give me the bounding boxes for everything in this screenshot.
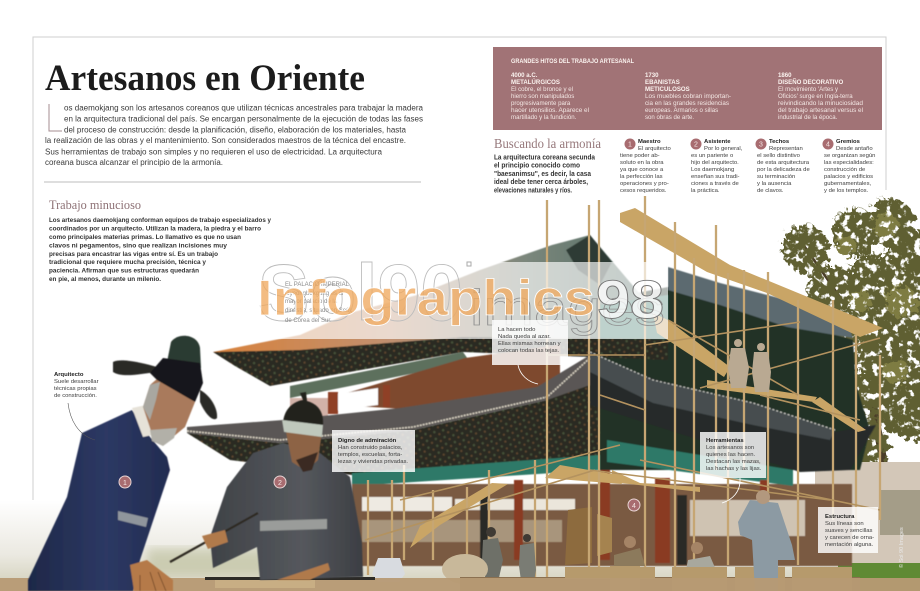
note 1: Maestro: Maestro <box>638 139 661 145</box>
text block: Trabajo minucioso: Los artesanos daemokjang conforman equipos de trabajo especializados y <box>49 217 271 224</box>
note 2: Asistente: Por lo general, <box>704 146 743 152</box>
text block: Trabajo minucioso: como principales materias primas. Lo llamativo es que no usan <box>49 234 241 241</box>
note 1: Maestro: 1 <box>628 142 632 148</box>
watermark: images <box>470 280 665 336</box>
watermark faint caption: de Corea del Sur. <box>285 318 332 324</box>
upper floor beams <box>340 345 560 410</box>
note 3: Techos: Representan <box>769 146 803 152</box>
marker 1: 1 <box>123 480 127 487</box>
note 3: Techos: Techos <box>769 139 790 145</box>
note 1: Maestro: ya que conoce a <box>620 167 664 173</box>
milestone: 1730: EBANISTAS <box>645 79 680 86</box>
callout: Estructura: mentación alguna. <box>825 542 874 548</box>
callout: La hacen todo: Ellas mismas hornean y <box>498 341 561 347</box>
milestone: 4000 a.C.: METALÚRGICOS <box>511 79 560 86</box>
note 3: Techos: y la ausencia <box>757 181 792 187</box>
rails <box>365 320 880 540</box>
note 4: Gremios: construcción de <box>824 167 866 173</box>
callout: Estructura: Sus líneas son <box>825 521 864 527</box>
note 4: Gremios: 4 <box>826 142 830 148</box>
callout: Estructura: suaves y sencillas <box>825 528 873 534</box>
marker 4: 4 <box>632 503 636 510</box>
intro text <box>45 104 424 167</box>
callout: Herramientas: quienes las hacen. <box>706 452 755 458</box>
milestone: 1860: 1860 <box>778 72 792 79</box>
milestone: 4000 a.C.: martillado y la fundición. <box>511 114 577 121</box>
milestone: 1730: Los muebles cobran importan- <box>645 93 731 100</box>
text block: Trabajo minucioso: precisas para encastrar las vigas entre sí. Es un trabajo <box>49 251 218 258</box>
callout: Estructura: y carecen de orna- <box>825 535 874 541</box>
heading: Trabajo minucioso: Trabajo minucioso <box>49 198 141 212</box>
perimeter wall <box>815 462 920 565</box>
planks <box>620 208 883 337</box>
note 1: Maestro: soluto en la obra <box>620 160 664 166</box>
marker 1 <box>119 476 131 488</box>
callout: Herramientas: Los artesanos son <box>706 445 754 451</box>
note 4: Gremios: palacios y edificios <box>824 174 873 180</box>
watermark: Sol90 <box>258 248 463 337</box>
scaffolding <box>365 196 883 591</box>
milestone: 1860: El movimiento 'Artes y <box>778 86 839 93</box>
note 2: Asistente: Los daemokjang <box>691 167 734 173</box>
callout: Digno de admiración: Han construido palacios, <box>338 445 403 451</box>
vases <box>372 554 488 584</box>
marker 2 <box>274 476 286 488</box>
text block: Trabajo minucioso <box>49 217 271 283</box>
milestone: 4000 a.C.: hacer utensilios. Aparece el <box>511 107 589 114</box>
text block: Buscando la armonía <box>494 152 596 194</box>
callout: Arquitecto: Suele desarrollar <box>54 379 99 385</box>
watermark faint caption <box>285 282 353 324</box>
lower floor <box>352 484 852 566</box>
wall band <box>290 352 470 398</box>
marker 4 <box>628 499 640 511</box>
watermark faint caption: dinastía, situado en Seúl, <box>285 308 353 314</box>
right wing slate roof <box>668 267 853 338</box>
note 2: Asistente: 2 <box>694 142 698 148</box>
milestone: 4000 a.C.: progresivamente para <box>511 100 571 107</box>
heading: Buscando la armonía: Buscando la armonía <box>494 136 601 151</box>
note 4: Gremios: Desde antaño <box>836 146 873 152</box>
marker 2: 2 <box>278 480 282 487</box>
credit: © Sol 90 Images <box>898 527 905 568</box>
callout: Estructura <box>818 507 878 553</box>
text block: Trabajo minucioso: coordinados por un arquitecto. Utilizan la madera, la piedra y el barro <box>49 226 261 232</box>
callout: Arquitecto: Arquitecto <box>54 372 84 378</box>
teal band right <box>607 440 793 486</box>
milestone: 1860: Oficios' surge en Ingla-terra <box>778 93 853 100</box>
milestone: 1860: DISEÑO DECORATIVO <box>778 79 843 86</box>
note 3: Techos: el sello distintivo <box>757 153 801 159</box>
milestone: 1730: europeas. Armarios o sillas <box>645 107 718 114</box>
note 4: Gremios: se organizan según <box>824 153 875 159</box>
callout: La hacen todo: colocan todas las tejas. <box>498 348 560 354</box>
note 4: Gremios: y de los templos. <box>824 188 869 194</box>
under eave brackets <box>213 337 668 386</box>
callout: Arquitecto <box>54 372 99 440</box>
callout: La hacen todo: La hacen todo <box>498 327 536 333</box>
main hall <box>187 235 876 566</box>
note 2: Asistente: enseñan sus tradi- <box>691 174 740 180</box>
callout: Digno de admiración: Digno de admiración <box>338 438 397 444</box>
workers on ground <box>482 527 716 588</box>
milestone: 1860: industrial de la época. <box>778 114 838 121</box>
watermark faint caption: EL PALACIO IMPERIAL <box>285 282 350 288</box>
callout: Estructura: Estructura <box>825 514 855 520</box>
drop cap L <box>49 104 62 131</box>
note 3: Techos <box>756 138 810 194</box>
lower right slate roof <box>590 352 835 440</box>
note 3: Techos: 3 <box>759 142 763 148</box>
intro text: la realización de las obras y el mantenimiento. Son considerados maestros de la técnica del encastre. <box>45 136 406 145</box>
note 2: Asistente <box>690 138 743 194</box>
lower right roof body <box>590 360 876 472</box>
callout: Arquitecto: de construcción. <box>54 393 97 399</box>
note 4: Gremios <box>822 138 875 194</box>
text block: Buscando la armonía: ideal debe tener cerca árboles, <box>494 177 588 186</box>
background landscape <box>0 500 920 591</box>
note 2: Asistente: es un pariente o <box>691 153 734 159</box>
milestone: 4000 a.C.: El cobre, el bronce y el <box>511 86 573 93</box>
text block: Trabajo minucioso: paciencia. Afirman que sus estructuras quedarán <box>49 268 199 274</box>
note 3: Techos: de clavos. <box>757 188 784 194</box>
worker in foreground <box>738 490 795 591</box>
milestone: 1730: son obras de arte. <box>645 114 694 121</box>
milestone: 1860 <box>778 72 863 121</box>
intro text: os daemokjang son los artesanos coreanos que utilizan técnicas ancestrales para trabajar la madera <box>64 104 424 112</box>
callout: Herramientas: Destacan las mazas, <box>706 459 761 465</box>
note 1: Maestro <box>620 138 671 194</box>
text block: Trabajo minucioso: tradicional que requiere mucha precisión, técnica y <box>49 259 206 266</box>
callout: Digno de admiración: lezas y viviendas privadas. <box>338 459 408 465</box>
figure: architect <box>28 336 217 591</box>
watermark: 98 <box>596 270 664 330</box>
note 2: Asistente: la práctica. <box>691 188 720 194</box>
text block: Buscando la armonía: el principio conocido como <box>494 160 580 170</box>
workers on scaffold <box>728 339 771 392</box>
callout: Herramientas: Herramientas <box>706 438 744 444</box>
milestone: 4000 a.C.: hierro son manipulados <box>511 93 574 100</box>
milestone: 1730: cia en las grandes residencias <box>645 100 729 107</box>
milestone: 1860: del trabajo artesanal versus el <box>778 107 863 114</box>
note 3: Techos: de esta arquitectura <box>757 160 810 166</box>
callout: La hacen todo <box>492 320 568 384</box>
wooden beams in foreground <box>460 566 860 591</box>
watermark <box>257 248 668 339</box>
callout: Digno de admiración <box>332 430 415 472</box>
carved lattice screens <box>565 507 612 565</box>
verticals <box>368 196 880 591</box>
upper roof <box>213 235 660 352</box>
milestone: 1730 <box>645 72 731 121</box>
note 4: Gremios: Gremios <box>836 139 861 145</box>
note 1: Maestro: operaciones y pro- <box>620 181 669 187</box>
title: Artesanos en Oriente <box>45 58 365 99</box>
figure: assistant <box>170 392 363 580</box>
milestone: 1860: reivindicando la minuciosidad <box>778 100 863 107</box>
milestone: 4000 a.C.: 4000 a.C. <box>511 72 538 79</box>
note 1: Maestro: El arquitecto <box>638 146 671 152</box>
milestone: 1730: METICULOSOS <box>645 86 690 93</box>
intro text: en la arquitectura tradicional del país. Se encargan personalmente de la ejecución de todas las fases <box>64 114 423 124</box>
text block: Trabajo minucioso: en pie, al menos, durante un milenio. <box>49 276 161 283</box>
watermark faint caption: Gyeongbokgung es el <box>285 291 343 297</box>
note 1: Maestro: tiene poder ab- <box>620 153 660 159</box>
callout: Arquitecto: técnicas propias <box>54 386 97 392</box>
text block: Buscando la armonía: elevaciones naturales y ríos. <box>494 186 572 194</box>
intro text: Sus herramientas de trabajo son simples y no requieren el uso de electricidad. La arquitectura <box>45 148 383 156</box>
panel: grandes hitos <box>493 47 882 130</box>
intro text: coreana busca alcanzar el principio de la armonía. <box>45 158 223 167</box>
callout: Digno de admiración: templos, escuelas, forta- <box>338 452 402 458</box>
text block: Trabajo minucioso: clavos ni pegamentos, sino que realizan incisiones muy <box>49 242 227 250</box>
note 2: Asistente: hijo del arquitecto. <box>691 160 739 166</box>
note 4: Gremios: las especialidades: <box>824 160 874 166</box>
callout: La hacen todo: Nada queda al azar. <box>498 334 551 340</box>
callout: Herramientas: las hachas y las lijas. <box>706 466 762 472</box>
lower left brackets <box>187 370 600 475</box>
right wing body <box>600 287 870 470</box>
watermark faint caption: mayor palacio de la <box>285 299 338 305</box>
tree <box>781 198 920 591</box>
note 1: Maestro: la perfección las <box>620 174 663 180</box>
intro text: del proceso de construcción: desde la planificación, diseño, elaboración de los materiales, hasta <box>64 126 407 134</box>
milestone: 1730: 1730 <box>645 72 659 79</box>
teal gable <box>600 295 668 342</box>
note 4: Gremios: gubernamentales, <box>824 181 872 187</box>
note 2: Asistente: ciones a través de <box>691 181 740 187</box>
note 2: Asistente: Asistente <box>704 139 731 145</box>
text block: Buscando la armonía: "baesanimsu", es decir, la casa <box>494 169 592 178</box>
callout: Herramientas <box>700 432 766 503</box>
milestone: 4000 a.C. <box>511 72 589 121</box>
grass <box>838 563 920 591</box>
lower left roof <box>187 355 610 443</box>
note 1: Maestro: cesos requeridos. <box>620 188 667 194</box>
text block: Buscando la armonía: La arquitectura coreana secunda <box>494 152 596 162</box>
note 3: Techos: su terminación <box>757 174 795 180</box>
note 3: Techos: por la delicadeza de <box>757 167 810 173</box>
panel heading: GRANDES HITOS DEL TRABAJO ARTESANAL <box>511 58 634 65</box>
table <box>0 577 920 591</box>
watermark: Infographics <box>257 270 595 326</box>
